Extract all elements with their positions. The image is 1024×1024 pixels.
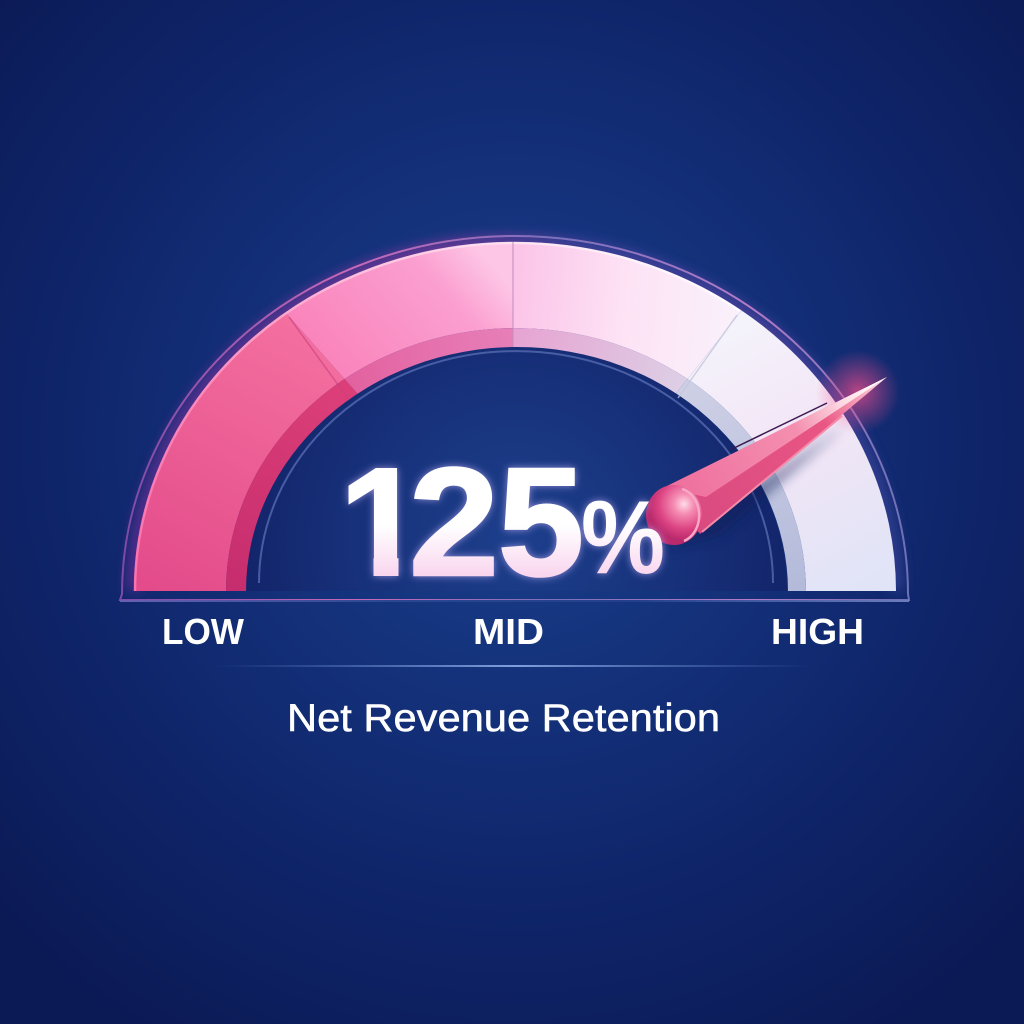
label: high: HIGH [771, 611, 864, 652]
divider [215, 665, 815, 667]
gauge highlight rim [135, 243, 740, 591]
gauge [120, 236, 909, 600]
gauge inner thin arc [259, 351, 773, 583]
value: 125%: 1 [339, 436, 425, 608]
needle upper facet [663, 377, 887, 497]
value: 125%: 2 [409, 436, 499, 608]
needle [646, 350, 900, 550]
needle lower edge highlight [702, 416, 842, 532]
segment: low [134, 312, 358, 591]
segment: lower mid [286, 242, 513, 394]
gauge inner well [245, 346, 787, 591]
base line [120, 600, 909, 602]
needle collar rim [682, 489, 699, 541]
needle shadow [665, 425, 845, 550]
needle dark edge [732, 403, 827, 449]
value: 125%: % [581, 480, 665, 596]
segment divider lines [289, 242, 737, 400]
value: 125% [343, 460, 668, 584]
gauge glow halo [134, 242, 896, 591]
caption: Net Revenue Retention [287, 697, 720, 740]
value: 125%: 5 [498, 436, 584, 608]
label: low: LOW [162, 611, 244, 652]
needle tip glow [816, 350, 900, 434]
segment: upper mid [513, 242, 742, 394]
needle body [663, 377, 887, 534]
needle pivot ball [646, 485, 702, 545]
gauge outer frame line [120, 236, 909, 600]
label: mid: MID [473, 611, 544, 652]
segment: high [676, 310, 896, 591]
